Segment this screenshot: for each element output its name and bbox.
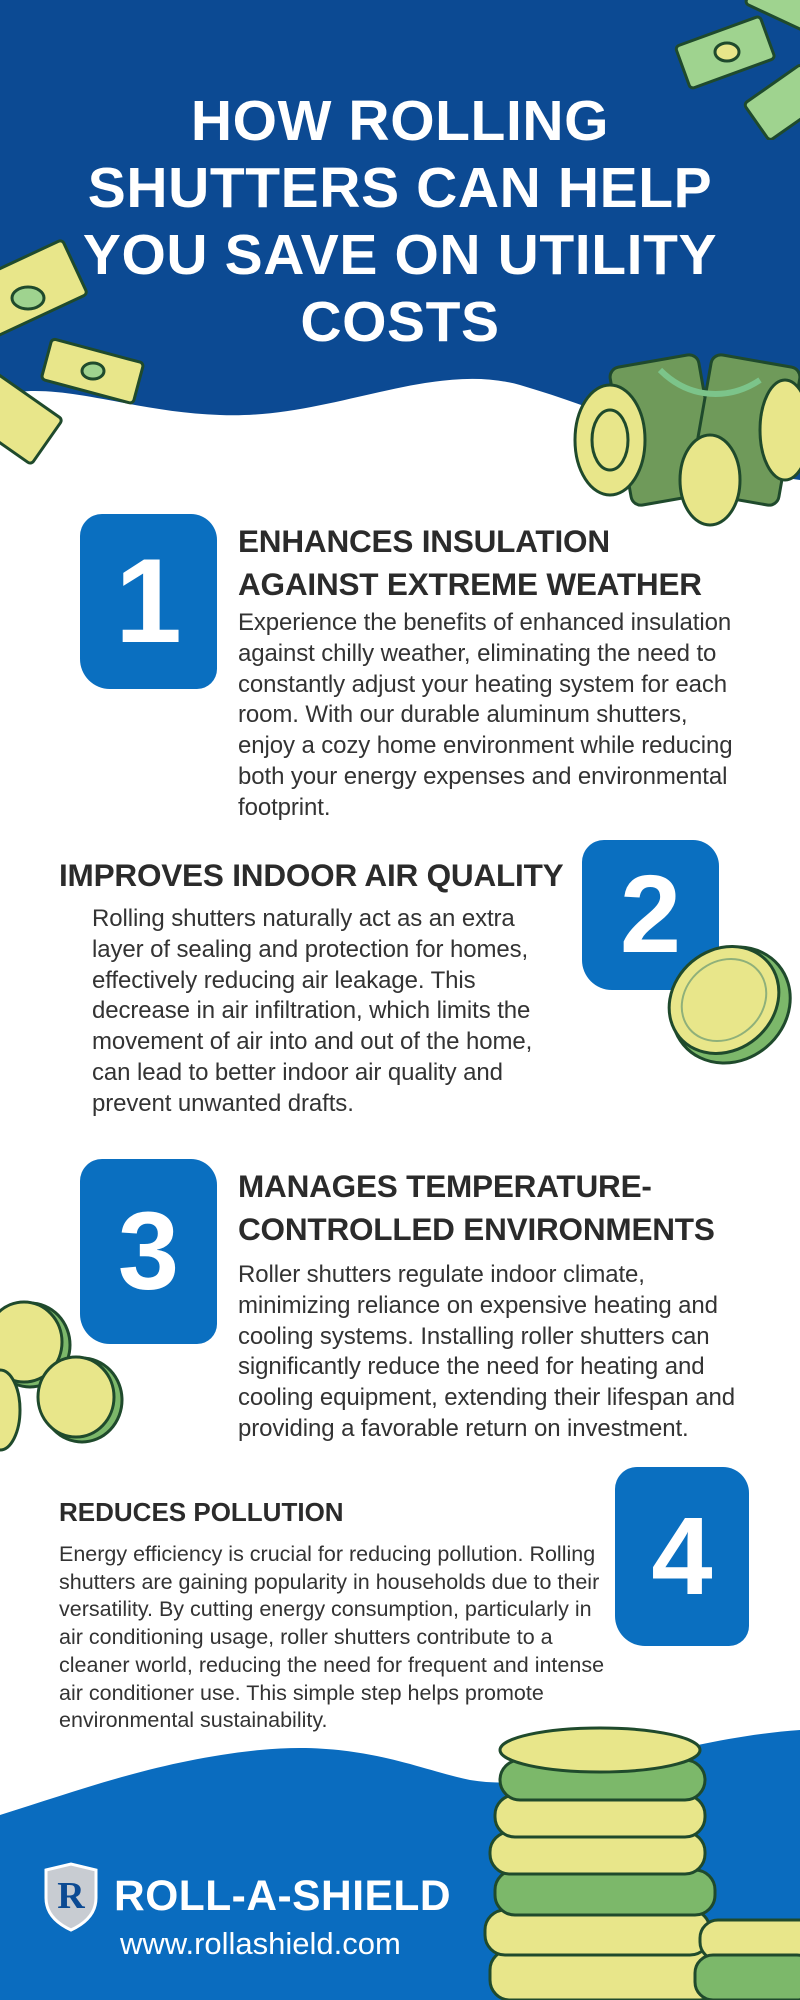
- heading 1: [238, 523, 702, 602]
- number box 3: [80, 1159, 217, 1344]
- number box 4: 4: [651, 1495, 713, 1618]
- number box 3: 3: [118, 1190, 179, 1313]
- body 1: footprint.: [238, 794, 330, 821]
- body 2: [92, 905, 532, 1117]
- icon: rolled money bundle: [574, 353, 800, 526]
- icon: shield: [44, 1862, 98, 1932]
- title: HOW ROLLING: [191, 89, 609, 153]
- panel: section 3: [80, 1159, 735, 1442]
- logo: Roll-A-Shield: [44, 1862, 451, 1961]
- body 4: environmental sustainability.: [59, 1708, 328, 1732]
- heading 3: MANAGES TEMPERATURE-: [238, 1168, 652, 1204]
- body 2: layer of sealing and protection for homes,: [92, 936, 528, 963]
- body 1: Experience the benefits of enhanced insulation: [238, 609, 731, 636]
- title: [83, 89, 717, 354]
- body 4: air conditioning usage, roller shutters contribute to a: [59, 1625, 553, 1649]
- icon: coin stack: [484, 1726, 800, 2000]
- title: SHUTTERS CAN HELP: [88, 156, 712, 220]
- number box 1: [80, 514, 217, 689]
- number box 1: 1: [115, 534, 182, 668]
- icon: shield: R: [57, 1875, 85, 1917]
- body 1: constantly adjust your heating system for each: [238, 671, 727, 698]
- panel: section 4: [59, 1467, 749, 1732]
- body 3: providing a favorable return on investment.: [238, 1415, 689, 1442]
- header background: [0, 0, 800, 480]
- panel: section 1: [80, 514, 733, 821]
- body 4: shutters are gaining popularity in households due to their: [59, 1570, 599, 1594]
- body 3: significantly reduce the need for heating and: [238, 1353, 704, 1380]
- body 1: enjoy a cozy home environment while reducing: [238, 732, 733, 759]
- body 4: cleaner world, reducing the need for frequent and intense: [59, 1653, 604, 1677]
- heading 1: ENHANCES INSULATION: [238, 523, 610, 559]
- heading 2: IMPROVES INDOOR AIR QUALITY: [59, 857, 563, 893]
- icon: money bills top right: [674, 0, 800, 140]
- bottom background wave: [0, 1730, 800, 2000]
- heading 3: CONTROLLED ENVIRONMENTS: [238, 1211, 715, 1247]
- title: COSTS: [300, 290, 500, 354]
- body 2: effectively reducing air leakage. This: [92, 967, 476, 994]
- body 1: [238, 609, 733, 821]
- title: YOU SAVE ON UTILITY: [83, 223, 717, 287]
- body 3: minimizing reliance on expensive heating and: [238, 1292, 718, 1319]
- number box 2: 2: [620, 853, 681, 976]
- icon: money bills left: [0, 239, 144, 464]
- body 2: decrease in air infiltration, which limits the: [92, 997, 530, 1024]
- number box 4: [615, 1467, 749, 1646]
- icon: coin: [668, 945, 792, 1064]
- body 4: versatility. By cutting energy consumption, particularly in: [59, 1597, 592, 1621]
- body 4: [59, 1542, 604, 1732]
- body 2: Rolling shutters naturally act as an extra: [92, 905, 515, 932]
- heading 1: AGAINST EXTREME WEATHER: [238, 566, 702, 602]
- brand name: ROLL-A-SHIELD: [114, 1873, 451, 1920]
- body 2: movement of air into and out of the home,: [92, 1028, 532, 1055]
- heading 3: [238, 1168, 715, 1247]
- body 3: cooling equipment, extending their lifespan and: [238, 1384, 735, 1411]
- body 1: room. With our durable aluminum shutters,: [238, 701, 687, 728]
- body 1: both your energy expenses and environmental: [238, 763, 727, 790]
- website url: www.rollashield.com: [120, 1926, 401, 1961]
- body 2: prevent unwanted drafts.: [92, 1090, 354, 1117]
- icon: coins left: [0, 1300, 124, 1452]
- body 1: against chilly weather, eliminating the need to: [238, 640, 716, 667]
- panel: section 2: [59, 840, 792, 1117]
- body 3: Roller shutters regulate indoor climate,: [238, 1261, 645, 1288]
- body 4: Energy efficiency is crucial for reducing pollution. Rolling: [59, 1542, 595, 1566]
- body 3: cooling systems. Installing roller shutters can: [238, 1323, 710, 1350]
- number box 2: [582, 840, 719, 990]
- body 2: can lead to better indoor air quality and: [92, 1059, 503, 1086]
- body 3: [238, 1261, 735, 1442]
- heading 4: REDUCES POLLUTION: [59, 1497, 344, 1527]
- body 4: air conditioner use. This simple step helps promote: [59, 1681, 544, 1705]
